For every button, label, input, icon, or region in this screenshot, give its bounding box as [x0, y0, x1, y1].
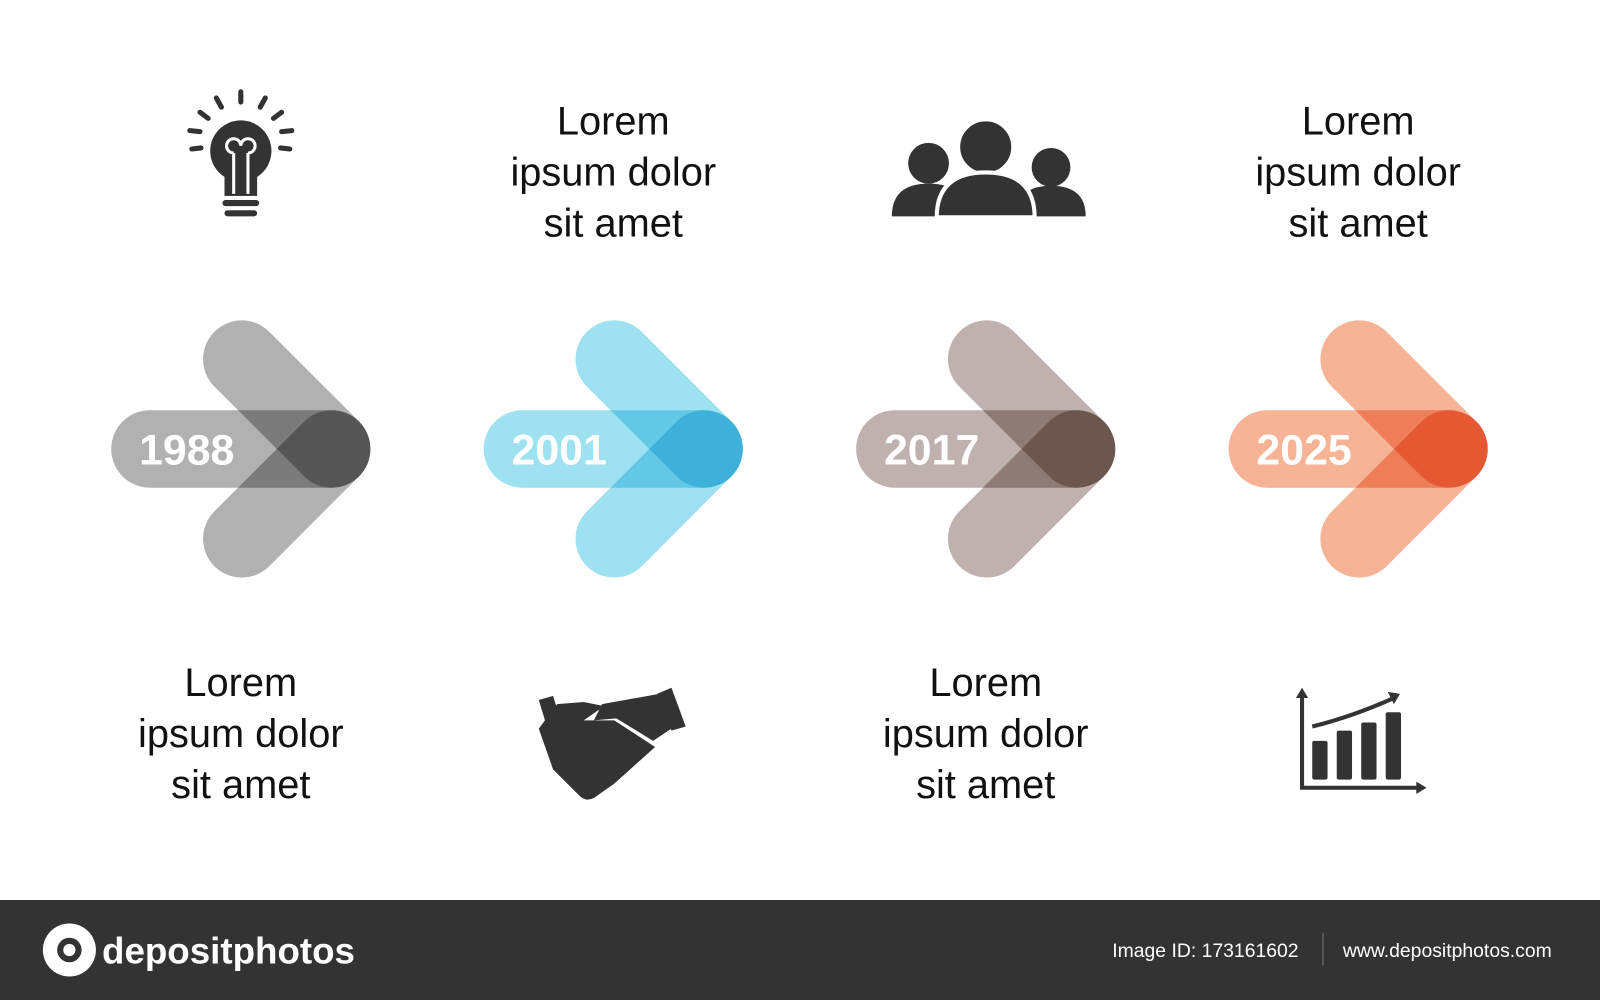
footer bar — [0, 900, 1600, 1000]
arrow 2017: 2017 — [884, 426, 979, 474]
arrow 2025: 2025 — [1256, 426, 1352, 474]
icon: people — [892, 119, 1086, 217]
arrow 2025 — [1256, 359, 1449, 539]
footer bar: depositphotos — [102, 930, 355, 971]
arrow 2017 — [884, 359, 1077, 539]
arrow 1988: 1988 — [139, 426, 234, 474]
text block 1988: sit amet — [171, 763, 310, 807]
text block 1988 — [138, 661, 344, 807]
text block 1988: Lorem — [184, 661, 297, 705]
text block 2025: ipsum dolor — [1255, 151, 1461, 195]
arrow 2001 — [512, 359, 704, 539]
text block 2001: sit amet — [544, 202, 683, 246]
icon: handshake — [539, 688, 686, 800]
text block 2025: sit amet — [1289, 202, 1428, 246]
arrow 2001: 2001 — [512, 426, 607, 474]
text block 2025: Lorem — [1302, 100, 1415, 144]
text block 2017 — [883, 661, 1089, 807]
text block 2001: Lorem — [557, 100, 670, 144]
footer bar: www.depositphotos.com — [1342, 940, 1552, 962]
icon: bar chart — [1296, 688, 1427, 794]
text block 2025 — [1255, 100, 1461, 246]
text block 1988: ipsum dolor — [138, 712, 344, 756]
text block 2017: sit amet — [916, 763, 1055, 807]
footer bar: Image ID: 173161602 — [1112, 940, 1299, 962]
text block 2017: Lorem — [929, 661, 1042, 705]
text block 2001: ipsum dolor — [510, 151, 716, 195]
icon: light bulb — [190, 92, 292, 216]
arrow 1988 — [139, 359, 332, 539]
text block 2017: ipsum dolor — [883, 712, 1089, 756]
text block 2001 — [510, 100, 716, 246]
